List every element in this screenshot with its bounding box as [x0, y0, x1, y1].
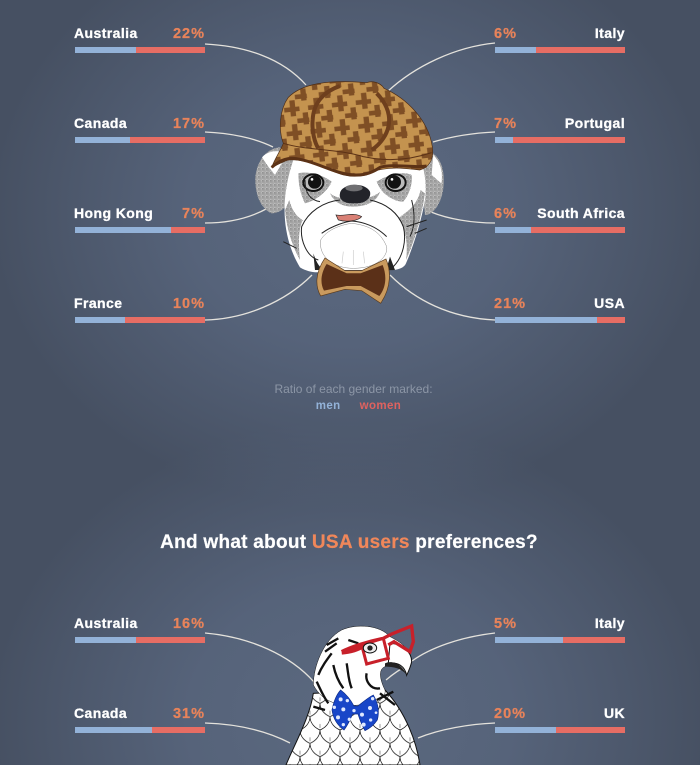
bow tie [317, 258, 389, 303]
bar: USA 21% [494, 295, 625, 323]
legend: ratio of each gender: Ratio of each gender marked: [274, 382, 433, 396]
bar: Hong Kong 7%: 7% [182, 206, 205, 222]
dog ears [255, 147, 444, 215]
bar: Australia 22%: 22% [173, 26, 205, 42]
bar: USA 21%: 21% [494, 296, 526, 312]
bar: Australia 16% [74, 615, 205, 643]
bar: Canada 17% [74, 115, 205, 143]
bar: Canada 31% [74, 705, 205, 733]
bar: Canada 31%: Canada [74, 705, 127, 721]
bar: Italy 5% [494, 615, 625, 643]
dog muzzle wrinkles [283, 180, 427, 267]
bar: Portugal 7%: Portugal [565, 115, 625, 131]
heading: USA users preferences: And what about USA users preferences? [160, 532, 538, 553]
bar: Canada 31%: 31% [173, 706, 205, 722]
dog jaw [320, 223, 387, 268]
bar: Australia 22% [74, 25, 205, 53]
bar: Italy 6%: Italy [595, 25, 625, 41]
bar: UK 20% [494, 705, 625, 733]
red glasses [342, 626, 413, 664]
eagle feather strokes [313, 638, 395, 710]
bar: South Africa 6% [494, 205, 625, 233]
bar: USA 21%: USA [594, 295, 625, 311]
bar: France 10%: 10% [173, 296, 205, 312]
bar: UK 20%: UK [604, 705, 625, 721]
illustration: eagle with red glasses and blue bow tie [286, 626, 420, 765]
dog nose [340, 185, 370, 203]
legend: ratio of each gender: men women [316, 400, 401, 412]
bar: South Africa 6%: South Africa [537, 205, 625, 221]
flat cap [272, 82, 433, 176]
blue bow tie [332, 690, 378, 731]
bar: Portugal 7%: 7% [494, 116, 517, 132]
illustration: bulldog with cap and bow tie [255, 82, 444, 303]
eagle head [313, 626, 412, 705]
bar: Canada 17%: Canada [74, 115, 127, 131]
connector lines [205, 43, 495, 743]
dog face [283, 160, 427, 272]
bar: Hong Kong 7%: Hong Kong [74, 205, 153, 221]
bar: UK 20%: 20% [494, 706, 526, 722]
bar: Italy 6% [494, 25, 625, 53]
eagle body [286, 690, 420, 765]
bar: Portugal 7% [494, 115, 625, 143]
bar: South Africa 6%: 6% [494, 206, 517, 222]
bar: Italy 5%: 5% [494, 616, 517, 632]
bar: Australia 16%: 16% [173, 616, 205, 632]
bar: Canada 17%: 17% [173, 116, 205, 132]
bar: Hong Kong 7% [74, 205, 205, 233]
bar: France 10% [74, 295, 205, 323]
legend: ratio of each gender [274, 382, 433, 412]
bar: Australia 16%: Australia [74, 615, 138, 631]
dog eyes [303, 174, 406, 191]
bar: Italy 6%: 6% [494, 26, 517, 42]
bar: Italy 5%: Italy [595, 615, 625, 631]
dog tongue [336, 214, 362, 221]
bar: France 10%: France [74, 295, 122, 311]
bar: Australia 22%: Australia [74, 25, 138, 41]
